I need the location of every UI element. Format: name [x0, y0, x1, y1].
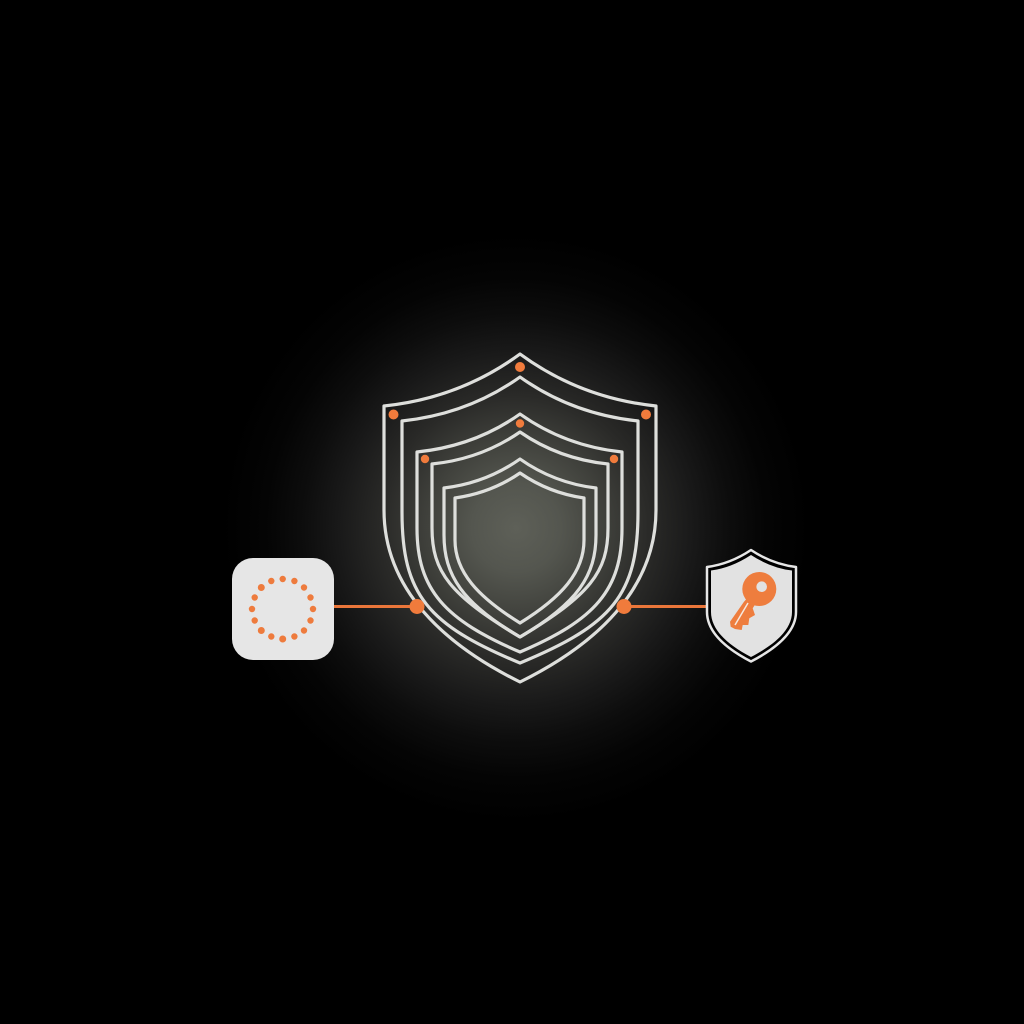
icon: key — [730, 572, 776, 630]
left connector — [332, 599, 424, 614]
orange shield dots — [388, 362, 651, 463]
icon: dotted ring — [249, 576, 316, 642]
right shield badge with key — [707, 550, 796, 662]
dot: middle right — [610, 455, 618, 463]
shield outline 3 — [417, 414, 622, 652]
shield outline 1 — [384, 354, 656, 682]
shield outline 2 — [402, 377, 638, 663]
concentric shield outlines — [384, 354, 656, 682]
dot: middle left — [421, 455, 429, 463]
dot: middle apex — [516, 419, 524, 428]
shield outline 5 — [444, 459, 596, 637]
shield outline 4 — [432, 432, 608, 637]
dot: outer right — [641, 410, 651, 420]
dot: outer left — [388, 410, 398, 420]
right connector — [616, 599, 708, 614]
left rounded panel with dotted ring — [232, 558, 334, 660]
dot: outer apex — [515, 362, 525, 372]
shield outline 6 — [455, 473, 584, 623]
